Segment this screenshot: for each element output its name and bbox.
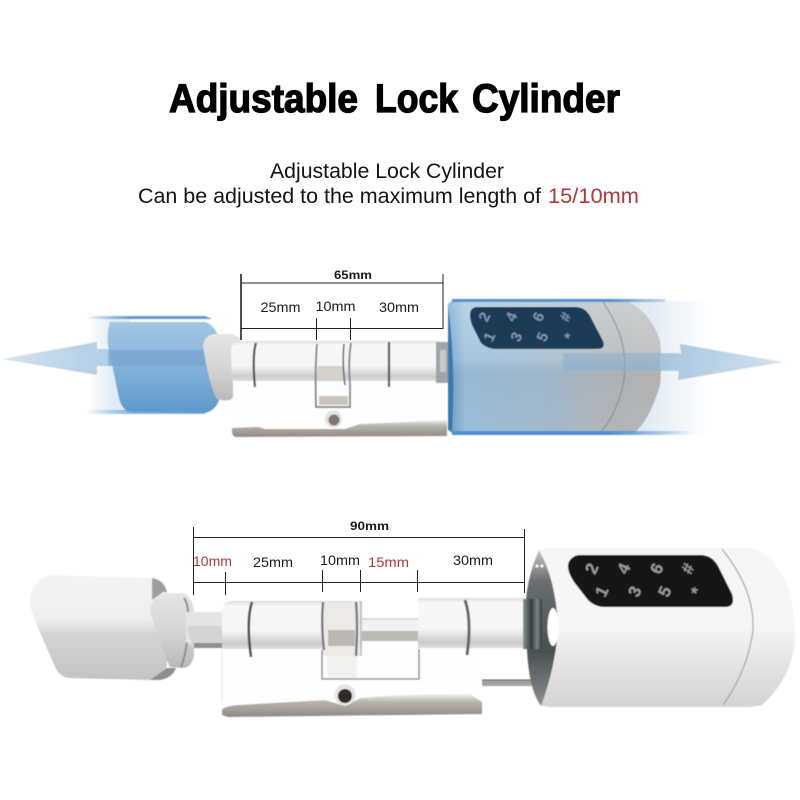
bottom dimension labels: 90mm [350,519,389,533]
bottom housing body [222,650,482,702]
right smart lock body, blue tinted [448,299,712,435]
top cylinder housing [231,341,448,437]
bottom lock illustration: extended 90mm [30,548,795,717]
subtitle: 15/10mm [548,185,639,208]
top dimension labels: 10mm [316,298,356,314]
bottom keypad: 4 [613,560,635,577]
title: Lock [375,77,459,121]
right arrow [660,344,783,380]
left collar [203,334,240,400]
subtitle: Can be adjusted to the maximum length of [138,185,541,208]
bottom keypad: 6 [646,560,668,577]
bottom keypad: 3 [624,583,646,600]
bottom dimension labels: 25mm [253,554,293,570]
bottom keypad: * [687,584,707,599]
bottom keypad [568,555,733,607]
bottom dimension labels: 10mm [320,552,360,568]
bottom dimension labels: 10mm [193,553,232,569]
title: Cylinder [472,77,620,121]
top keypad [470,307,604,349]
top dimension labels [260,268,419,315]
left knob, blue tinted [88,316,220,414]
bottom left collar [150,593,194,668]
top keypad: # [556,309,576,324]
subtitle [138,160,639,208]
title: Adjustable [169,77,358,121]
bottom keypad: 1 [591,583,613,600]
top lock illustration: retracted 65mm [2,299,783,437]
top dimension labels: 30mm [379,299,419,315]
top dimension labels: 25mm [260,299,300,315]
bottom keypad: # [677,560,699,577]
bottom base plate [222,684,482,717]
bottom dimension lines [193,527,524,595]
top keypad: * [561,331,579,343]
top keypad: 6 [529,310,548,324]
subtitle: Adjustable Lock Cylinder [270,160,504,183]
bottom keypad: 2 [581,560,603,577]
top dimension labels: 65mm [334,268,372,282]
bottom left knob [30,575,176,680]
bottom dimension labels: 15mm [368,554,409,570]
bottom left cylinder [222,601,362,657]
bottom dimension labels [193,519,493,570]
bottom smart lock body [540,548,795,707]
bottom keypad: 5 [654,583,676,600]
bottom right cylinder [418,598,540,686]
bottom cam slot [322,619,419,679]
top dimension lines [241,274,443,340]
title [169,77,620,121]
left arrow [2,342,205,375]
top keypad: 3 [507,330,526,344]
top keypad: 5 [533,330,552,344]
bottom hex shaft [186,612,224,648]
top keypad: 1 [480,330,499,344]
bottom dimension labels: 30mm [453,552,493,568]
bottom lock rim and collar [523,550,558,706]
top keypad: 2 [475,310,494,324]
top keypad: 4 [502,309,522,324]
